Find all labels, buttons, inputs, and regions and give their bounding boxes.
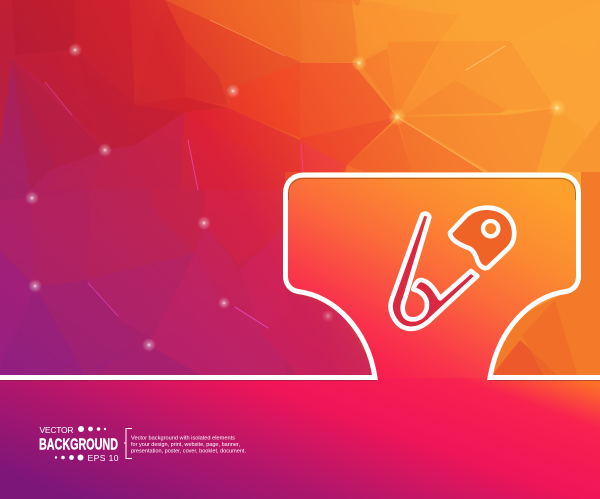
bracket	[124, 428, 132, 458]
EPS 10 text: EPS 10	[88, 453, 119, 463]
lower dots	[55, 454, 84, 460]
icon: safety pin	[391, 208, 514, 329]
inner shadow edge	[288, 178, 576, 200]
pin head	[450, 208, 514, 268]
panel outline	[0, 175, 600, 378]
description text	[131, 436, 246, 454]
pin wire	[391, 214, 477, 329]
VECTOR text: VECTOR	[40, 425, 74, 435]
description text: presentation, poster, cover, booklet, document.	[131, 448, 246, 454]
BACKGROUND text: BACKGROUND	[39, 436, 118, 454]
panel fill	[286, 175, 578, 378]
upper dots	[78, 426, 106, 432]
light streaks	[45, 20, 505, 328]
panel: diaper shape with icon	[0, 175, 600, 378]
polygon background	[0, 0, 600, 380]
description text: Vector background with isolated elements	[131, 436, 235, 442]
description text: for your design, print, website, page, banner,	[131, 442, 240, 448]
pin head hole	[483, 221, 498, 236]
bottom band	[0, 378, 600, 499]
sparkles	[25, 43, 566, 352]
panel outline shadow	[0, 376, 600, 381]
label: vector background logo	[39, 425, 119, 463]
